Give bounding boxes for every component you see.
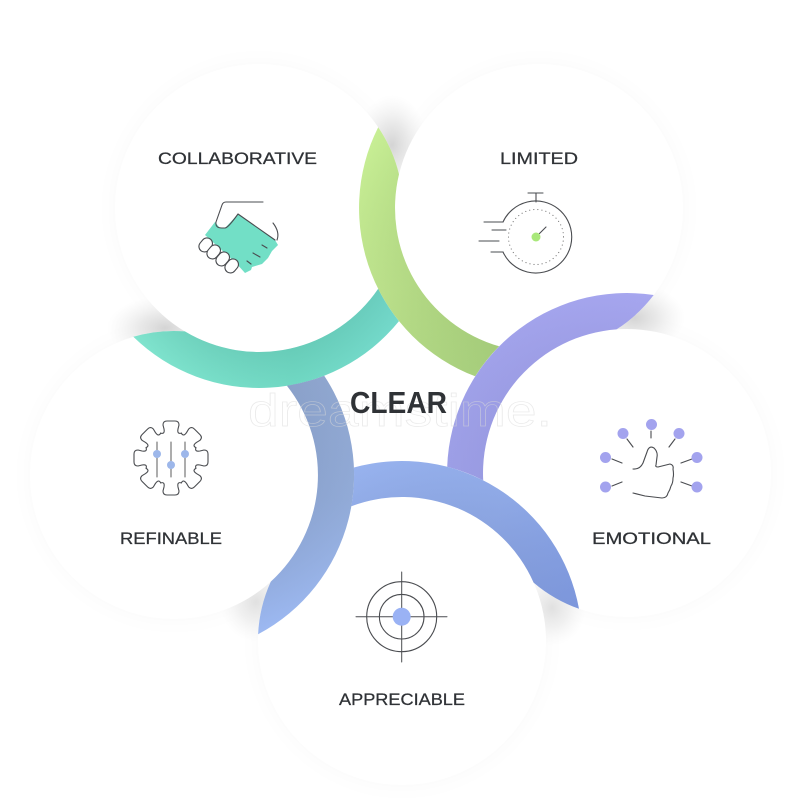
band: blue arc <box>351 461 579 609</box>
panel: collaborative <box>115 64 403 352</box>
heading: refinable: REFINABLE <box>120 530 222 548</box>
heading: emotional: EMOTIONAL <box>592 530 711 548</box>
panel: limited <box>395 64 683 352</box>
panel: appreciable <box>258 497 546 785</box>
title: CLEAR <box>350 385 447 420</box>
heading: collaborative: COLLABORATIVE <box>158 150 317 168</box>
band: purple arc <box>447 293 654 480</box>
icon: handshake <box>197 202 278 275</box>
panel: refinable <box>30 331 318 619</box>
watermark: dreamstime. <box>248 385 552 436</box>
heading: limited: LIMITED <box>500 150 578 168</box>
heading: appreciable: APPRECIABLE <box>339 691 465 709</box>
panel: emotional <box>483 329 771 617</box>
band: green arc <box>359 127 499 376</box>
icon: stopwatch <box>479 193 572 273</box>
wedge shadows between circles <box>107 95 685 646</box>
band: teal arc <box>133 289 399 388</box>
icon: thumbs up <box>600 419 702 498</box>
band: slate arc <box>258 376 354 634</box>
icon: gear with sliders <box>134 421 208 495</box>
icon: target <box>356 572 447 662</box>
